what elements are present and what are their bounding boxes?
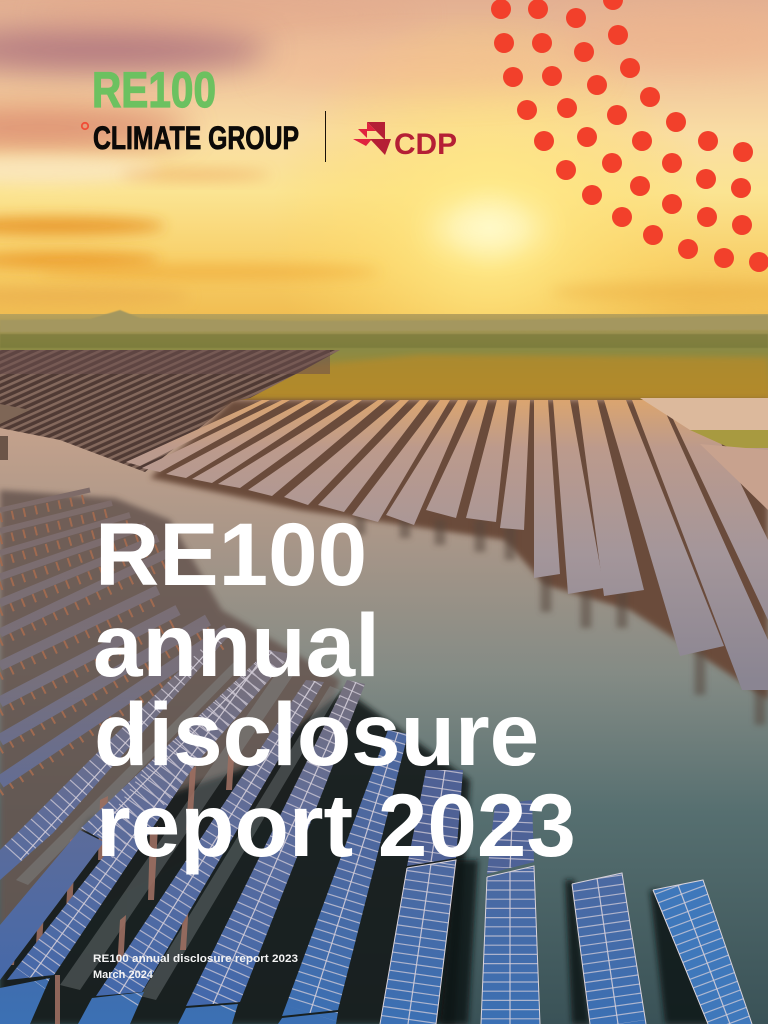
solar field: left rows with posts <box>0 490 230 792</box>
background: sunset sky <box>0 0 768 325</box>
solar field: far left brown rows <box>0 350 340 472</box>
caption: March 2024 <box>93 969 154 981</box>
title: report 2023 <box>96 775 576 875</box>
solar field: panel shadows on water <box>440 860 712 1024</box>
solar panels: strip outlines <box>380 860 752 1024</box>
solar field: central fan rows <box>126 398 768 690</box>
title: disclosure <box>94 684 539 784</box>
solar panels: foreground blue arrays <box>380 770 752 1024</box>
solar field: central fan base and reflections <box>150 400 768 725</box>
logo divider <box>325 111 326 162</box>
solar field: posts and side faces under long strips <box>10 660 340 1024</box>
caption: RE100 annual disclosure report 2023 <box>93 953 298 965</box>
background: water <box>0 400 768 1024</box>
title: RE100 <box>95 504 367 604</box>
solar field: mid-tone base behind left rows <box>0 490 340 960</box>
logo: RE100: RE100 <box>92 62 216 118</box>
solar field: long blue strips lower left <box>0 640 408 1024</box>
logo: CDP <box>353 122 457 161</box>
background: distant land <box>0 310 768 406</box>
title: annual <box>93 595 380 695</box>
solar field: dark shadow under lower panels <box>0 690 470 1024</box>
logo: Climate Group: CLIMATE GROUP <box>93 120 299 156</box>
logo: CDP: CDP <box>394 128 457 161</box>
solar panels: cell grid lines <box>20 640 730 1024</box>
decorative red dot pattern <box>491 0 768 272</box>
